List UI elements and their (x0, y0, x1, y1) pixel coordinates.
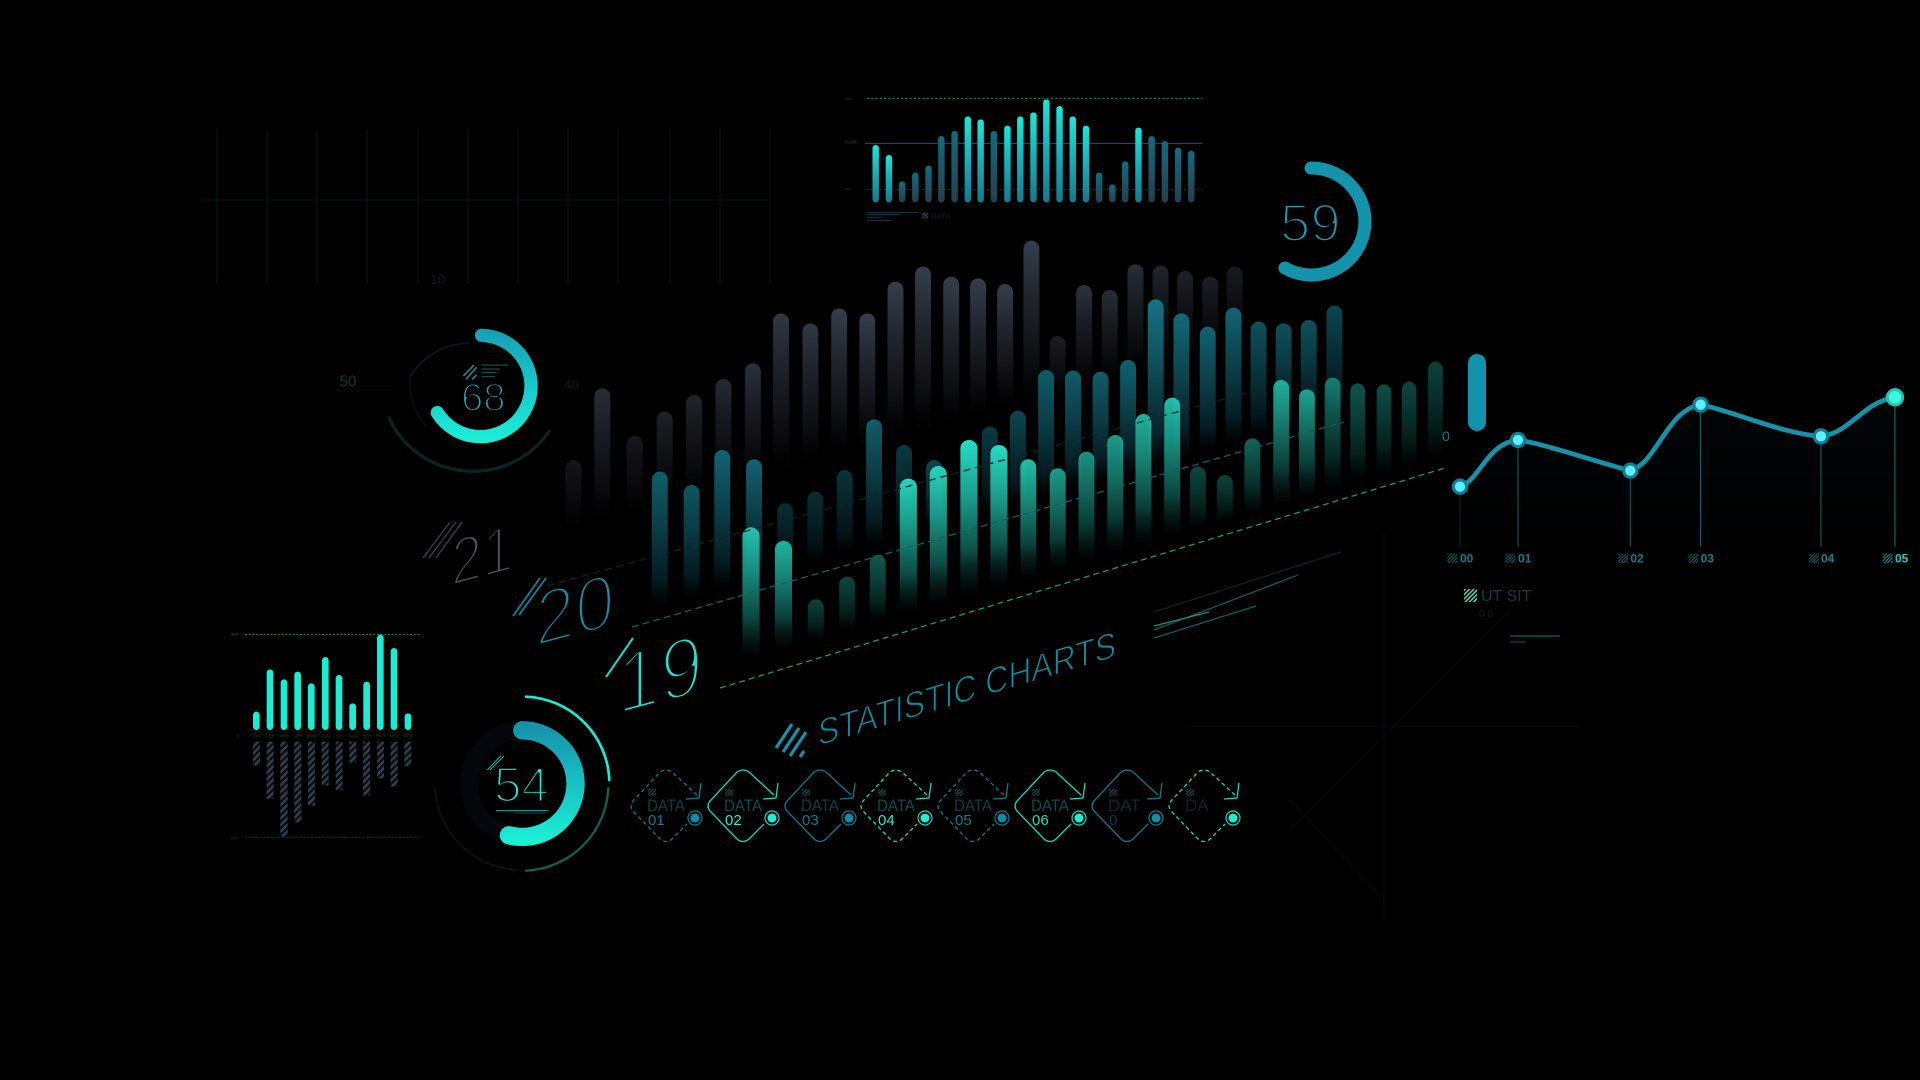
monthly chart axis labels: DEC (404, 733, 413, 738)
donut 59 arc (1285, 168, 1365, 275)
data item 05 (938, 770, 1009, 842)
line chart axis labels: 01 (1518, 552, 1532, 566)
data item 01: DATA (647, 796, 686, 815)
donut 54 outer ring segments (435, 697, 609, 871)
monthly chart axis labels: max (231, 632, 240, 637)
data item 07 (1092, 770, 1163, 842)
title accent lines (1154, 552, 1341, 638)
top chart axis labels: middle (845, 139, 858, 144)
monthly chart axis labels: OCT (376, 733, 386, 738)
monthly chart axis labels: JAN (252, 733, 261, 738)
line chart curve (1460, 397, 1895, 487)
line chart axis labels: 00 (1460, 552, 1474, 566)
data item 08 (1169, 770, 1240, 842)
data item 08: DA (1185, 796, 1209, 815)
year 20 slashes (513, 578, 546, 616)
title text: STATISTIC CHARTS (818, 624, 1116, 755)
back row bars: grey (566, 241, 1243, 531)
top chart axis labels (845, 95, 858, 192)
line chart (1447, 390, 1909, 566)
data item 04: DATA (877, 796, 916, 815)
data item 03 (785, 770, 856, 842)
data item 06: DATA (1031, 796, 1070, 815)
top chart legend (867, 212, 952, 220)
faint lower-right construction lines (1190, 530, 1580, 920)
monthly bar chart and donut 54 (231, 632, 609, 871)
monthly chart axis labels: FEB (266, 733, 275, 738)
year 21 value: 21 (451, 511, 513, 601)
axis zero label: 0 (1442, 428, 1450, 444)
year 19 slash (606, 638, 633, 677)
top chart axis labels: max (845, 95, 853, 101)
outer dim rings (388, 343, 550, 471)
3D perspective bar chart (547, 241, 1445, 688)
monthly chart axis labels: JUN (321, 733, 330, 738)
top bar chart (845, 95, 1202, 220)
line chart droplines (1460, 397, 1895, 547)
data item 05: DATA (954, 796, 993, 815)
monthly chart axis labels: SEP (363, 733, 371, 738)
year 19 value: 19 (617, 614, 703, 734)
donut 54 value: 54 (494, 758, 549, 813)
data item 02: 02 (725, 812, 742, 829)
data item 06 (1015, 770, 1086, 842)
line chart axis labels: 04 (1821, 552, 1835, 566)
top chart reference lines (865, 98, 1202, 190)
monthly chart axis labels: 0 (237, 733, 240, 738)
faint background grid: 10 (430, 271, 446, 287)
top chart bars (872, 99, 1195, 202)
data item 01 (631, 770, 702, 842)
data item 07: DAT (1108, 796, 1141, 815)
title block (776, 552, 1341, 757)
data item 07: 0 (1109, 812, 1117, 829)
monthly chart axis labels (231, 632, 413, 840)
year 20 (513, 556, 615, 664)
year 21 (423, 511, 513, 601)
monthly chart reference lines (245, 634, 419, 837)
donut 68 icon (463, 365, 508, 379)
year 20 value: 20 (535, 556, 615, 664)
data diamond row (631, 770, 1240, 842)
data item 05: 05 (955, 812, 972, 829)
dashed base lines (547, 393, 1445, 688)
line chart axis labels: 02 (1630, 552, 1644, 566)
line chart area (1460, 397, 1895, 547)
middle row bars: teal (652, 299, 1342, 607)
side label 40: 40 (564, 377, 579, 392)
monthly hatched negative bars (253, 742, 411, 837)
fading caption (1464, 588, 1560, 642)
top chart axis labels: min (845, 186, 852, 192)
donut 54 underline (496, 811, 548, 813)
data item 06: 06 (1032, 812, 1049, 829)
line chart points (1453, 390, 1903, 493)
data item 03: 03 (802, 812, 819, 829)
monthly chart axis labels: MAR (279, 733, 289, 738)
fading caption: 0 0 (1479, 609, 1493, 620)
fading caption: UT SIT (1481, 588, 1532, 605)
year 19 (606, 614, 703, 734)
monthly chart axis labels: AUG (349, 733, 359, 738)
monthly chart axis labels: NOV (390, 733, 399, 738)
faint background grid (202, 129, 770, 287)
side label 50 (337, 374, 397, 391)
data item 02: DATA (724, 796, 763, 815)
data item 04: 04 (878, 812, 895, 829)
tall teal marker bar (1468, 354, 1486, 431)
donut 68 arc (437, 335, 531, 437)
monthly chart axis labels: JUL (335, 733, 344, 738)
donut 54 slashes (487, 756, 504, 770)
donut 54 (435, 697, 609, 871)
front row bars: green (742, 362, 1443, 660)
donut 59 value: 59 (1280, 194, 1341, 253)
monthly chart axis labels: MAY (307, 733, 316, 738)
donut 68 value: 68 (461, 376, 506, 420)
title icon (776, 724, 806, 757)
line chart axis labels: 05 (1895, 552, 1909, 566)
data item 01: 01 (648, 812, 665, 829)
data item 02 (708, 770, 779, 842)
monthly positive bars (253, 635, 411, 730)
donut 68 and side labels (337, 335, 579, 471)
monthly chart axis labels: APR (294, 733, 303, 738)
donut 59 (1280, 168, 1365, 275)
year 21 slashes (423, 522, 462, 558)
line chart axis labels (1447, 552, 1909, 566)
line chart axis labels: 03 (1701, 552, 1714, 566)
top chart legend: DATA (931, 212, 952, 220)
donut 54 track (469, 730, 576, 837)
data item 04 (861, 770, 932, 842)
monthly chart axis labels: min (231, 835, 239, 840)
donut 54 arc (509, 730, 576, 837)
data item 03: DATA (801, 796, 840, 815)
side label 50: 50 (339, 374, 356, 391)
